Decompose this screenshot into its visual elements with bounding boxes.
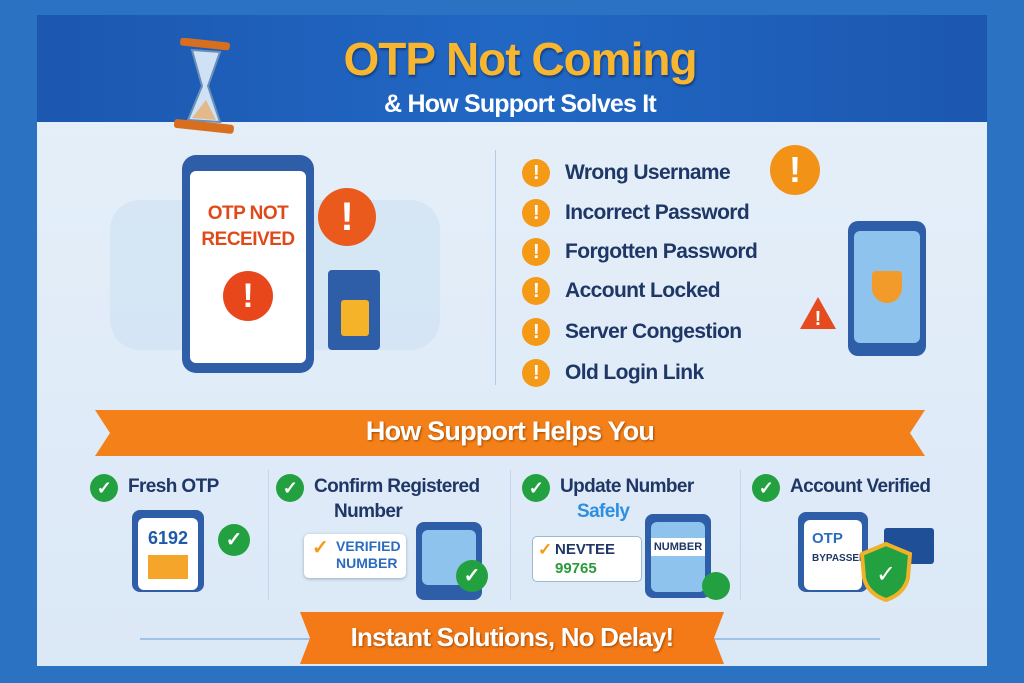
icon: shield xyxy=(860,542,912,602)
phone illustration xyxy=(798,512,868,592)
title: OTP Not Coming xyxy=(343,33,697,85)
icon: orange alert: ! xyxy=(789,149,801,190)
heading: Safely xyxy=(577,501,629,522)
heading: ✓ xyxy=(759,478,773,498)
number tag: NEVTEE xyxy=(555,541,615,558)
envelope xyxy=(884,528,934,564)
column dividers xyxy=(268,470,269,600)
banner: Instant Solutions xyxy=(300,612,724,664)
verified number tag: ✓ xyxy=(312,537,329,559)
item: Old Login Link xyxy=(565,361,704,384)
number tag: ✓ xyxy=(538,540,552,559)
item: Wrong Username xyxy=(565,161,730,184)
phone illustration: OTP xyxy=(812,530,843,547)
item xyxy=(522,199,749,227)
phone illustration: 6192 xyxy=(148,528,188,548)
item xyxy=(522,318,742,346)
item: Server Congestion xyxy=(565,320,742,343)
icon: warning triangle xyxy=(800,297,836,330)
header band xyxy=(37,15,987,122)
heading: Fresh OTP xyxy=(128,476,219,497)
number tag: 99765 xyxy=(555,560,597,577)
phone illustration: BYPASSED xyxy=(812,553,866,564)
phone: RECEIVED xyxy=(201,229,295,250)
item: ! xyxy=(533,240,539,262)
phone: OTP NOT xyxy=(208,203,288,224)
heading: Account Verified xyxy=(790,476,930,497)
item: ! xyxy=(533,362,539,384)
item: ! xyxy=(533,280,539,302)
heading xyxy=(276,474,480,522)
banner: How Support Helps You xyxy=(95,410,925,456)
item xyxy=(522,159,730,187)
heading: Update Number xyxy=(560,476,694,497)
icon: alert circle: ! xyxy=(340,195,354,239)
left illustration: phone OTP not received xyxy=(110,155,440,373)
icon: sim card xyxy=(328,270,380,350)
column: Fresh OTP xyxy=(90,474,250,592)
icon: check xyxy=(218,524,250,556)
phone illustration xyxy=(416,522,482,600)
heading: Confirm Registered xyxy=(314,476,480,497)
icon: alert circle xyxy=(318,188,376,246)
phone illustration: NUMBER xyxy=(654,541,702,553)
icon: check: ✓ xyxy=(464,565,480,587)
icon: hourglass xyxy=(174,38,234,134)
icon: green badge xyxy=(702,572,730,600)
phone xyxy=(848,221,926,356)
verified number tag: VERIFIED NUMBER xyxy=(336,538,401,571)
item: Incorrect Password xyxy=(565,201,749,224)
heading: Number xyxy=(334,501,402,522)
icon: orange alert xyxy=(770,145,820,195)
right illustration: phone with warnings xyxy=(770,145,926,356)
icon: shield: ✓ xyxy=(876,560,896,588)
item xyxy=(522,238,757,266)
banner: How Support Helps You: How Support Helps You xyxy=(366,416,654,446)
icon: check: ✓ xyxy=(226,529,242,551)
heading: ✓ xyxy=(529,478,543,498)
divider xyxy=(495,150,496,385)
heading xyxy=(90,474,219,502)
number tag xyxy=(532,536,642,582)
heading: ✓ xyxy=(97,478,111,498)
item: ! xyxy=(533,320,539,342)
column: Confirm Registered Number xyxy=(276,474,488,600)
column: Account Verified xyxy=(752,474,934,602)
subtitle: & How Support Solves It xyxy=(384,90,656,118)
icon: check xyxy=(456,560,488,592)
column: Update Number Safely xyxy=(522,474,730,600)
phone xyxy=(182,155,314,373)
bottom line xyxy=(140,638,880,640)
phone: ! xyxy=(242,277,254,315)
heading xyxy=(752,474,930,502)
banner: Instant Solutions: Instant Solutions, No Delay! xyxy=(351,622,673,652)
phone illustration xyxy=(132,510,204,592)
background blob xyxy=(110,200,440,350)
list of causes xyxy=(522,159,757,387)
item xyxy=(522,359,704,387)
item: Forgotten Password xyxy=(565,240,757,263)
phone illustration xyxy=(645,514,711,598)
item: ! xyxy=(533,162,539,184)
verified number tag xyxy=(304,534,406,578)
heading xyxy=(522,474,694,522)
icon: warning triangle: ! xyxy=(815,308,821,330)
item xyxy=(522,277,720,305)
heading: ✓ xyxy=(283,478,297,498)
item: Account Locked xyxy=(565,279,720,302)
item: ! xyxy=(533,202,539,224)
